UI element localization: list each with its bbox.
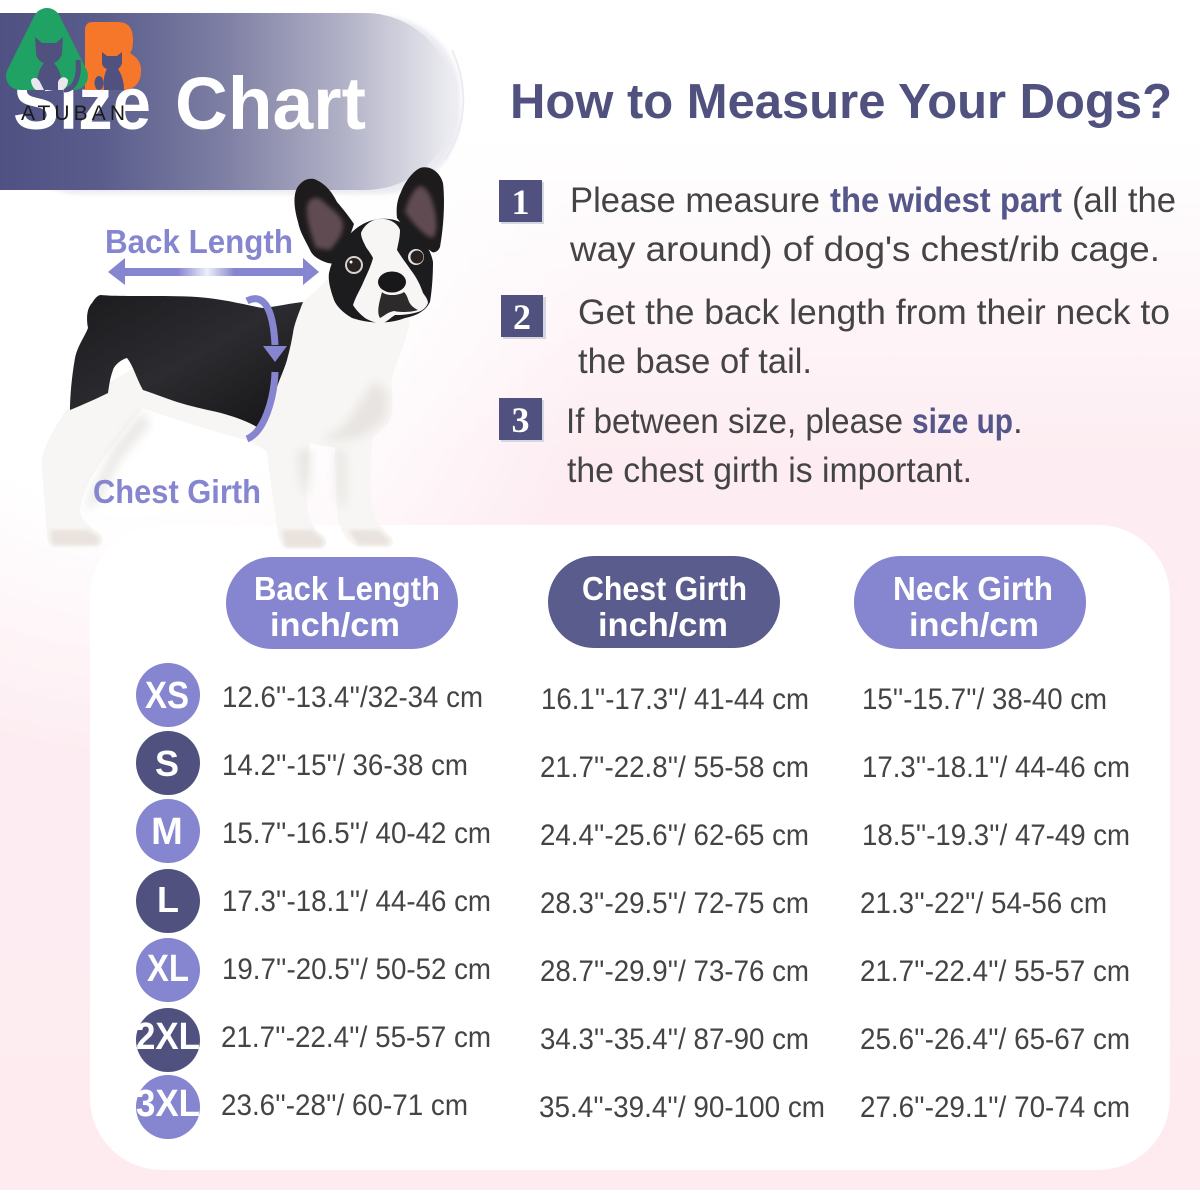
row 3XL: 35.4''-39.4''/ 90-100 cm [539, 1091, 825, 1124]
title: Chart [175, 62, 366, 145]
pill: back length: inch/cm [270, 606, 400, 643]
icon: left cat [31, 37, 78, 90]
logo: Atuban [20, 22, 141, 125]
chest girth label: Chest Girth [93, 473, 261, 510]
row XS: 15''-15.7''/ 38-40 cm [862, 683, 1107, 716]
pill: neck girth: inch/cm [909, 606, 1039, 643]
row XL: 28.7''-29.9''/ 73-76 cm [540, 955, 809, 988]
pill: back length: Back Length [254, 570, 440, 607]
row S: S [155, 743, 179, 784]
row XS: 12.6''-13.4''/32-34 cm [222, 681, 483, 714]
row 3XL [136, 1075, 1130, 1139]
step 3 text [566, 402, 1023, 490]
pill: chest girth [548, 556, 780, 648]
step 3 text: If between size, please [566, 402, 903, 441]
title: Size [13, 62, 151, 145]
dog nose [378, 272, 406, 292]
pill: neck girth: Neck Girth [893, 570, 1053, 607]
row XL: 21.7''-22.4''/ 55-57 cm [860, 955, 1130, 988]
dog mouth [378, 292, 418, 318]
row L [136, 869, 1107, 933]
row 2XL: 25.6''-26.4''/ 65-67 cm [860, 1023, 1130, 1056]
row 2XL: 2XL [136, 1016, 200, 1058]
dog white body [41, 280, 410, 548]
number 3: 3 [512, 400, 530, 440]
step 1 text: Please measure [570, 181, 820, 220]
number box 3 [499, 398, 542, 440]
row 2XL [136, 1008, 1130, 1072]
dog head [329, 219, 433, 322]
row XS: 16.1''-17.3''/ 41-44 cm [541, 683, 809, 716]
step 2 [501, 293, 1170, 381]
step 1 text: the widest part [830, 181, 1062, 220]
step 3 [499, 398, 1023, 490]
icon: orange B [85, 22, 141, 90]
row L: L [157, 879, 179, 920]
row S: 17.3''-18.1''/ 44-46 cm [862, 751, 1130, 784]
icon: green triangle [20, 22, 74, 76]
number box 2 [501, 295, 543, 337]
number 1: 1 [512, 182, 530, 222]
row M: 24.4''-25.6''/ 62-65 cm [540, 819, 809, 852]
row XL [136, 938, 1130, 1002]
row M [136, 799, 1130, 863]
row L: 28.3''-29.5''/ 72-75 cm [540, 887, 809, 920]
row XL: 19.7''-20.5''/ 50-52 cm [222, 953, 491, 986]
step 1 text: way around) of dog's chest/rib cage. [569, 230, 1160, 269]
step 2 text: Get the back length from their neck to [578, 293, 1170, 332]
heading: How to Measure Your Dogs? [510, 75, 1172, 129]
step 2 text: the base of tail. [578, 342, 812, 381]
dog paws [50, 530, 390, 547]
pill: chest girth: Chest Girth [582, 570, 747, 607]
step 3 text: size up [912, 402, 1013, 441]
arrow: back length [108, 258, 319, 285]
row 3XL: 23.6''-28''/ 60-71 cm [221, 1089, 468, 1122]
step 2 text [578, 293, 1170, 381]
dog left ear [294, 179, 354, 265]
row 3XL: 3XL [136, 1083, 200, 1125]
row S [136, 731, 1130, 795]
row XS [136, 663, 1107, 727]
icon: right cat [94, 52, 124, 90]
step 3 text: the chest girth is important. [567, 451, 972, 490]
panel: size table background [90, 525, 1170, 1170]
row M: 18.5''-19.3''/ 47-49 cm [862, 819, 1130, 852]
dog right eye [408, 249, 424, 265]
row S: 14.2''-15''/ 36-38 cm [222, 749, 468, 782]
row 2XL: 34.3''-35.4''/ 87-90 cm [540, 1023, 809, 1056]
row XL: XL [147, 948, 189, 990]
row M: M [151, 811, 183, 853]
logo wordmark: ATUBAN [21, 102, 125, 125]
row M: 15.7''-16.5''/ 40-42 cm [222, 817, 491, 850]
pill: back length [226, 557, 458, 649]
panel: size chart banner [0, 13, 463, 194]
title [13, 62, 366, 145]
row L: 17.3''-18.1''/ 44-46 cm [222, 885, 491, 918]
dog right ear [397, 167, 444, 252]
dog black body patch [70, 295, 303, 427]
pill: neck girth [854, 556, 1086, 649]
dog illustration [41, 167, 444, 548]
dog white blaze [353, 219, 428, 323]
row XS: XS [145, 675, 189, 717]
row 2XL: 21.7''-22.4''/ 55-57 cm [221, 1021, 491, 1054]
row 3XL: 27.6''-29.1''/ 70-74 cm [860, 1091, 1130, 1124]
dog body shading [84, 380, 388, 512]
step 1 text: (all the [1072, 181, 1176, 220]
row L: 21.3''-22''/ 54-56 cm [860, 887, 1107, 920]
pill: chest girth: inch/cm [598, 606, 728, 643]
step 3 text: . [1013, 402, 1023, 441]
row S: 21.7''-22.8''/ 55-58 cm [540, 751, 809, 784]
number 2: 2 [513, 297, 531, 337]
number box 1 [499, 180, 542, 222]
dog left eye [345, 256, 363, 274]
arrow: chest girth [247, 299, 287, 439]
back length label: Back Length [105, 223, 293, 260]
step 1 text [569, 181, 1176, 269]
step 1 [499, 180, 1176, 269]
